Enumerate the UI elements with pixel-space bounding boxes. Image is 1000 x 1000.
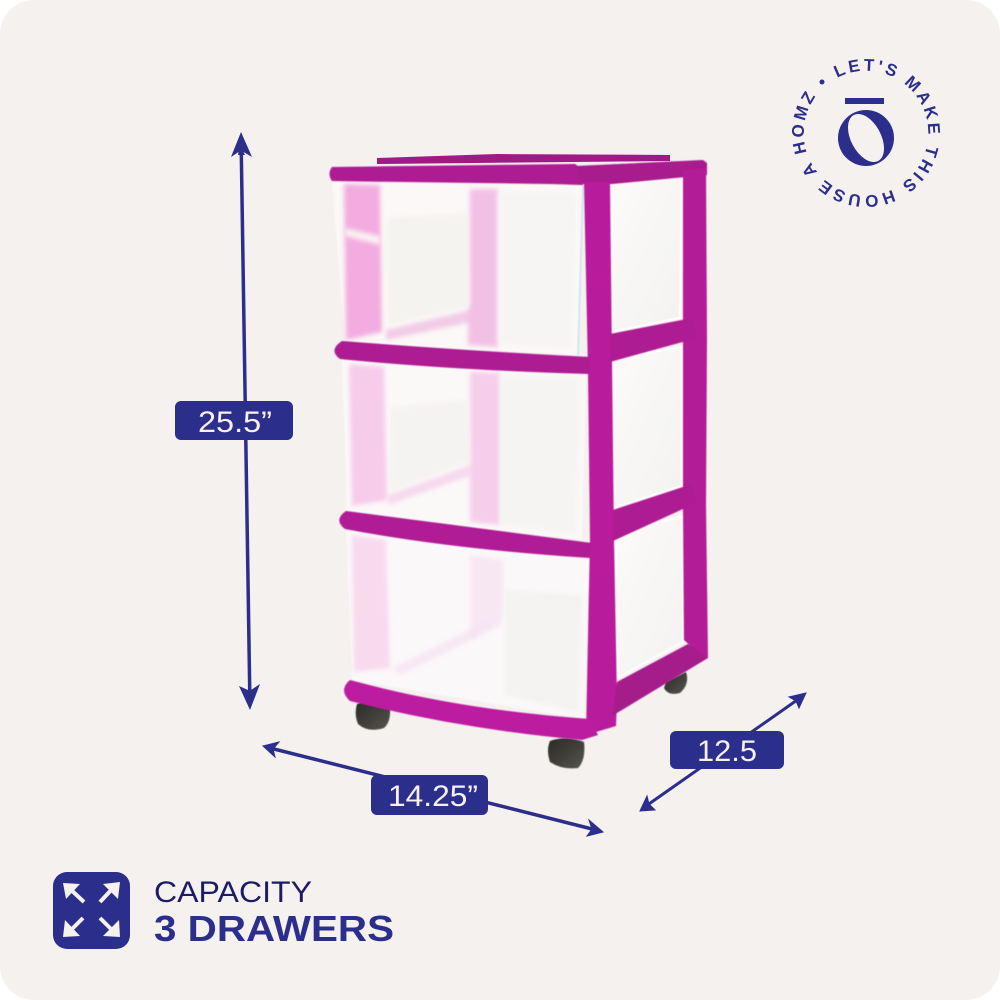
front rail 2: [334, 341, 590, 374]
frame: [330, 160, 708, 740]
front rail 3: [339, 511, 592, 558]
label: height 25.5: [175, 401, 293, 440]
arrow: depth dimension: [640, 693, 806, 811]
logo badge: LET'S MAKE THIS HOUSE A HOMZ: [792, 59, 940, 207]
side rail 1: [610, 318, 697, 362]
logo macron bar: [845, 98, 884, 104]
product: three drawer storage cart: [330, 154, 708, 768]
text: capacity heading: CAPACITY: [154, 876, 312, 909]
label: depth 12.5: [670, 731, 784, 769]
side panels: [610, 177, 682, 332]
logo letter o: [838, 108, 894, 168]
text: 3 drawers value: 3 DRAWERS: [154, 908, 394, 949]
arrow: width dimension: [263, 742, 603, 836]
label: depth 12.5: 12.5: [697, 735, 757, 768]
bottom rail: [344, 680, 598, 740]
label: width 14.25: 14.25”: [388, 780, 478, 813]
icon: expand arrows: [53, 872, 130, 949]
side rail 3: [612, 644, 708, 716]
drawers: [332, 177, 683, 719]
drawer 3: [346, 530, 590, 719]
front post: [584, 182, 617, 735]
top lid: [377, 154, 670, 164]
arrow: height dimension: [231, 132, 260, 710]
label: width 14.25: [371, 775, 488, 815]
top side rail: [575, 160, 707, 184]
label: height 25.5: 25.5”: [198, 406, 272, 439]
back post: [683, 168, 708, 658]
wheels: [356, 672, 687, 768]
drawer 2: [342, 360, 586, 540]
side rail 2: [613, 484, 696, 541]
logo dot: [820, 80, 824, 84]
drawer 1: [332, 182, 583, 355]
top front rail: [330, 164, 583, 185]
logo ring text: [804, 71, 928, 195]
